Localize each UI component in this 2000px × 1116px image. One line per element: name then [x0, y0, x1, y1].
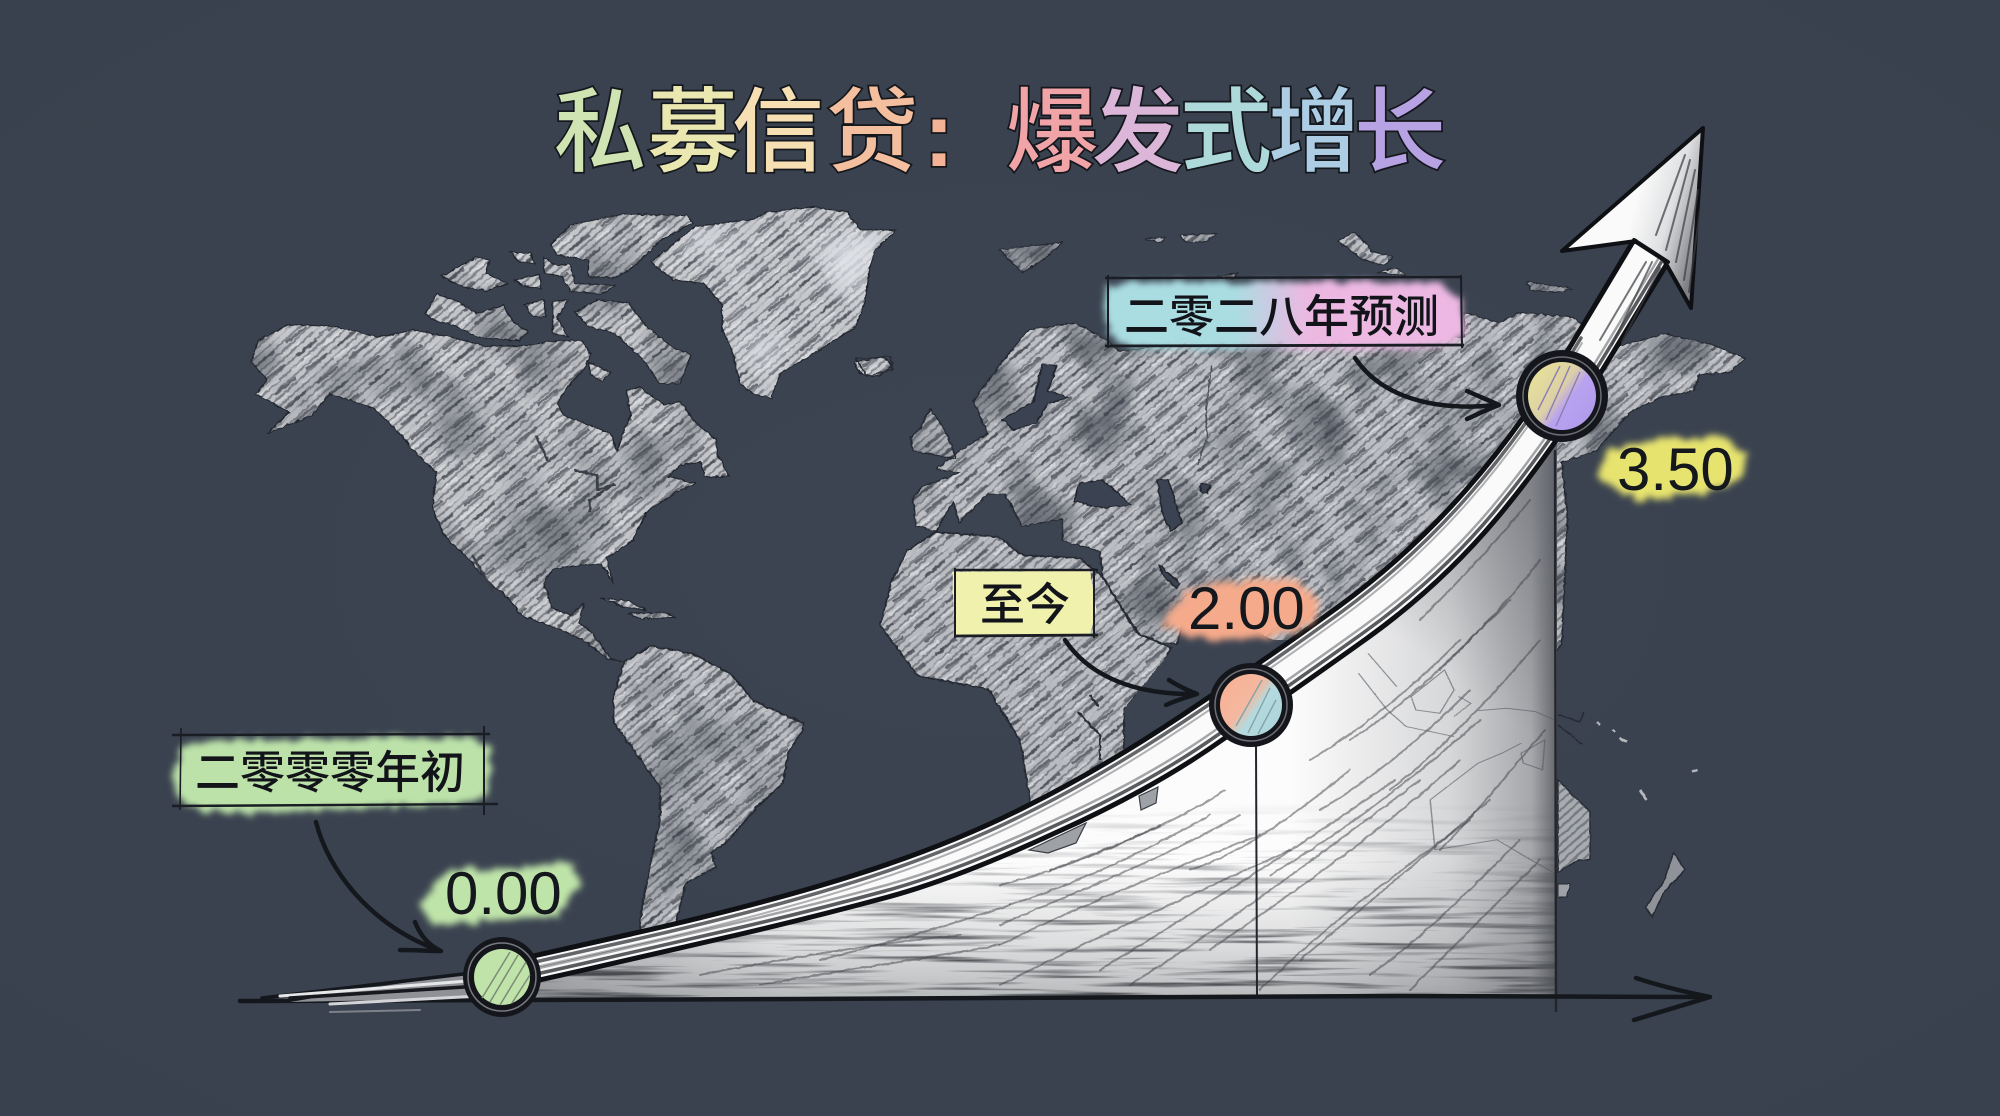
land: africa [879, 531, 1172, 802]
label: 2028 forecast: 二零二八年预测 [1124, 280, 1439, 345]
inland seas [1002, 364, 1212, 588]
value: 0.00: 0.00 [445, 860, 562, 927]
title: 长 [1354, 58, 1446, 191]
value: 3.50: 3.50 [1617, 436, 1734, 503]
title: 募 [647, 58, 739, 191]
title: 增 [1268, 58, 1360, 191]
label: to date [952, 568, 1098, 638]
title: 发 [1092, 58, 1184, 191]
land: south america [612, 645, 804, 930]
ribbon shading [499, 251, 1665, 982]
callout arrow: early 2000 [316, 822, 441, 951]
title: : [924, 84, 954, 186]
land: greenland and iceland [650, 206, 896, 400]
vertical guide lines [1256, 450, 1556, 1012]
callout arrow: to date [1065, 640, 1197, 705]
label: to date: 至今 [980, 568, 1070, 633]
growth curve arrow [262, 128, 1703, 1012]
area under growth curve [279, 444, 1557, 999]
title: 私 [554, 58, 646, 191]
label: early 2000: 二零零零年初 [195, 736, 465, 801]
x axis arrow [240, 978, 1710, 1020]
land: arabian sea [1124, 640, 1292, 760]
title: 贷 [826, 58, 918, 191]
world map [240, 200, 1760, 950]
label: early 2000 [172, 726, 498, 815]
land: australia and oceania [1558, 712, 1698, 917]
title: 信 [732, 58, 824, 191]
arrowhead [1562, 128, 1703, 308]
title: 式 [1180, 58, 1272, 191]
data point: today [1209, 663, 1293, 747]
value: 2.00: 2.00 [1188, 575, 1305, 642]
ghost map lines [1358, 653, 1554, 873]
data point: start [463, 937, 541, 1017]
land: eurasia [855, 232, 1746, 651]
callout arrow: 2028 forecast [1355, 358, 1499, 419]
land: north america [250, 212, 730, 662]
title: 爆 [1006, 58, 1098, 191]
pencil strokes [700, 500, 1545, 990]
data point: forecast [1516, 350, 1608, 442]
curve ribbon [502, 240, 1668, 988]
curve start wedge [262, 970, 480, 1012]
title [554, 58, 1446, 191]
land: southern africa tips [1029, 787, 1158, 853]
